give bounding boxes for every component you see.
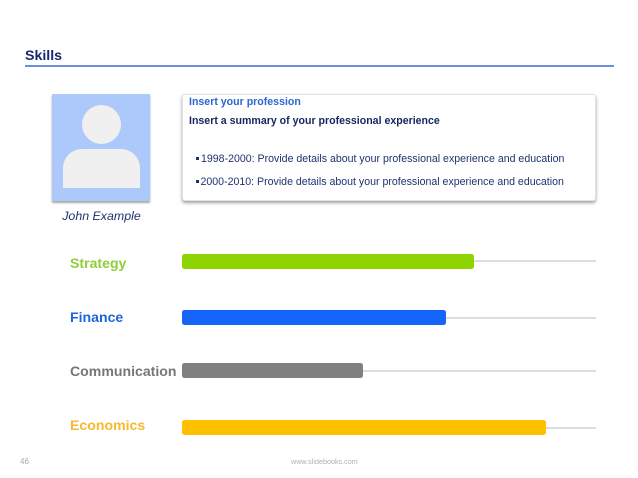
finance bar xyxy=(182,310,446,325)
panel: professional summary xyxy=(182,94,596,201)
page number: 46 xyxy=(20,457,29,466)
economics track xyxy=(182,427,596,429)
icon: shoulders xyxy=(63,149,140,188)
icon: profile photo placeholder xyxy=(52,94,150,201)
finance track xyxy=(182,317,596,319)
title underline xyxy=(25,65,614,67)
strategy track xyxy=(182,260,596,262)
profile name: John Example xyxy=(62,209,141,223)
communication label: Communication xyxy=(70,363,176,379)
communication bar xyxy=(182,363,363,378)
title: Skills xyxy=(25,48,62,64)
strategy label: Strategy xyxy=(70,255,126,271)
profession heading: Insert your profession xyxy=(189,96,301,108)
bullet two: 2000-2010: Provide details about your professional experience and education xyxy=(200,176,564,188)
strategy bar xyxy=(182,254,474,269)
finance label: Finance xyxy=(70,309,123,325)
summary heading: Insert a summary of your professional experience xyxy=(189,115,440,127)
bullet one: 1998-2000: Provide details about your professional experience and education xyxy=(201,153,564,165)
economics bar xyxy=(182,420,546,435)
economics label: Economics xyxy=(70,417,145,433)
footer url: www.slidebooks.com xyxy=(291,457,358,466)
communication track xyxy=(182,370,596,372)
icon: head xyxy=(82,105,121,144)
